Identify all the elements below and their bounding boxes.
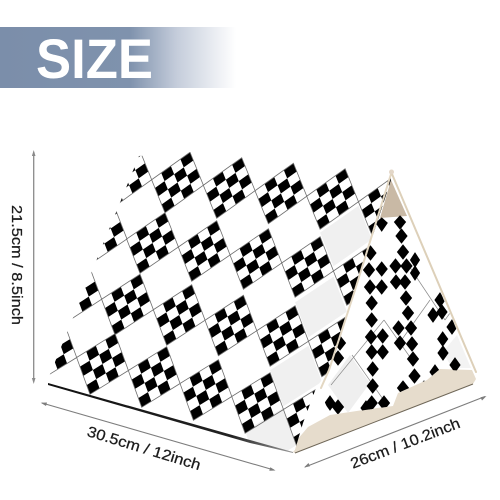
floor front edge shadow <box>295 384 473 453</box>
checker clusters row 2 <box>96 211 368 306</box>
checker clusters row 3 <box>72 272 346 378</box>
tent interior and floor <box>293 180 476 453</box>
label: height: 21.5cm / 8.5inch <box>8 205 25 325</box>
heading: SIZE: SIZE <box>36 27 153 90</box>
arrow: width <box>304 396 486 468</box>
banner: SIZE <box>0 27 236 90</box>
interior fabric pattern <box>325 216 471 415</box>
bottom edge shadow of left face <box>48 383 293 453</box>
mottled grey blocks <box>245 206 372 468</box>
fabric base <box>293 222 378 452</box>
floor board <box>293 369 476 453</box>
label: length: 30.5cm / 12inch <box>85 423 203 474</box>
back wall beige triangle <box>380 180 407 218</box>
checker clusters row 4 <box>50 331 316 446</box>
tent left face: checker argyle fabric <box>50 152 391 452</box>
arrow: height <box>32 150 36 384</box>
checker clusters row 1 <box>120 152 391 235</box>
wooden rods <box>321 170 476 388</box>
left rod <box>321 174 391 388</box>
right rod <box>392 174 476 372</box>
label: width: 26cm / 10.2inch <box>348 415 463 473</box>
arrow: length <box>41 402 276 471</box>
apex knob <box>389 170 394 174</box>
